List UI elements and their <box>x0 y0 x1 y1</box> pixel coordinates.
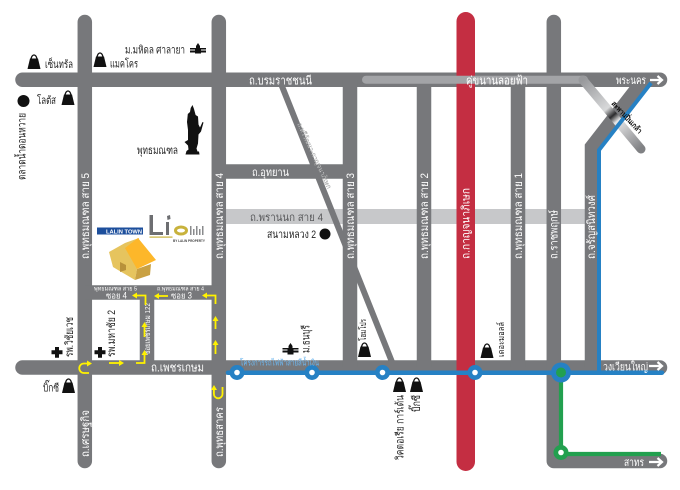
vertical road labels: ถ.พุทธมณฑล สาย 2 <box>419 173 431 259</box>
yellow direction arrows <box>79 292 222 398</box>
horizontal road labels: สาทร <box>624 457 644 469</box>
blue train line <box>228 83 662 380</box>
vertical road labels: สะพานปิ่นเกล้า <box>610 98 646 135</box>
horizontal road labels: โครงการรถไฟฟ้าสายสีน้ำเงิน <box>240 356 319 368</box>
road: Kanchanaphisek (red) <box>456 12 475 471</box>
place labels: สนามหลวง 2 <box>267 229 316 241</box>
icon: shopping bags <box>28 53 494 393</box>
horizontal road labels: พระนคร <box>616 75 646 87</box>
place labels <box>14 44 506 461</box>
logo: Lio: BY LALIN PROPERTY <box>173 239 206 243</box>
place labels: บิ๊กซี <box>43 380 59 394</box>
horizontal road labels: ถ.บรมราชชนนี <box>249 74 312 88</box>
place labels: เซ็นทรัล <box>45 57 73 71</box>
icon: house <box>109 238 156 280</box>
horizontal road labels: ซอย 3 <box>171 290 192 300</box>
horizontal road labels: ถ.เพชรเกษม <box>151 360 204 374</box>
vertical road labels: ซอยเพชรเกษม 122 <box>143 303 152 355</box>
icon: hospital crosses <box>52 347 106 358</box>
elevated parallel road <box>366 80 641 149</box>
place labels: บิ๊กซี <box>408 395 423 412</box>
place labels: รพ.มหาชัย 2 <box>106 310 118 357</box>
white road arrows <box>649 76 662 466</box>
vertical road labels: ถ.ราชพฤกษ์ <box>548 210 560 259</box>
horizontal road labels: ถ.พรานนก สาย 4 <box>250 212 323 224</box>
place labels: รพ.วิชัยเวช <box>64 317 76 357</box>
logo: Lalin Town: LALIN TOWN <box>106 229 142 235</box>
horizontal road labels: ถ.อุทยาน <box>252 167 289 179</box>
logo: Lio <box>150 215 206 243</box>
logo: Lalin Town <box>97 228 143 235</box>
place labels: ตลาดน้ำดอนหวาย <box>14 113 28 180</box>
icon: university buildings <box>190 43 298 354</box>
vertical road labels <box>80 98 646 457</box>
place labels: แมคโคร <box>110 56 138 70</box>
road: Phran Nok 4 <box>226 209 586 224</box>
place labels: เดอะมอลล์ <box>495 322 506 357</box>
place labels: โฮมโปร <box>358 319 368 341</box>
vertical road labels: ถ.กาญจนาภิเษก <box>460 188 472 259</box>
green train line <box>551 362 661 460</box>
horizontal road labels: คู่ขนานลอยฟ้า <box>466 74 528 88</box>
horizontal road labels: วงเวียนใหญ่ <box>603 360 648 374</box>
horizontal road labels: ซอย 4 <box>106 290 127 300</box>
horizontal road labels: ถ.พุทธมณฑล สาย 4 <box>157 286 204 292</box>
vertical road labels: ถ.พุทธสาคร <box>214 407 226 457</box>
horizontal road labels: พุทธมณฑล สาย 5 <box>94 286 137 292</box>
place labels: วิคตอเรีย การ์เด้น <box>394 395 406 461</box>
vertical road labels: ถ.พุทธมณฑล สาย 5 <box>80 173 92 259</box>
place labels: ม.มหิดล ศาลายา <box>125 44 185 56</box>
vertical road labels: ถ.พุทธมณฑล สาย 3 <box>345 173 357 259</box>
icon: Buddha statue <box>184 105 204 154</box>
vertical road labels: ถ.พุทธมณฑล สาย 4 <box>214 173 226 259</box>
vertical road labels: ถ.จรัญสนิทวงศ์ <box>585 195 598 259</box>
place labels: พุทธมณฑล <box>137 145 178 157</box>
vertical road labels: ถ.พุทธมณฑล สาย 1 <box>513 173 525 259</box>
vertical road labels: ถ.ทวีวัฒนา-กาญจนาภิเษก <box>295 121 333 190</box>
place labels: ม.ธนบุรี <box>300 325 312 353</box>
icon: location dots <box>18 95 330 240</box>
horizontal road labels <box>94 74 648 469</box>
vertical road labels: ถ.เศรษฐกิจ <box>80 410 92 457</box>
place labels: โลตัส <box>37 93 56 107</box>
